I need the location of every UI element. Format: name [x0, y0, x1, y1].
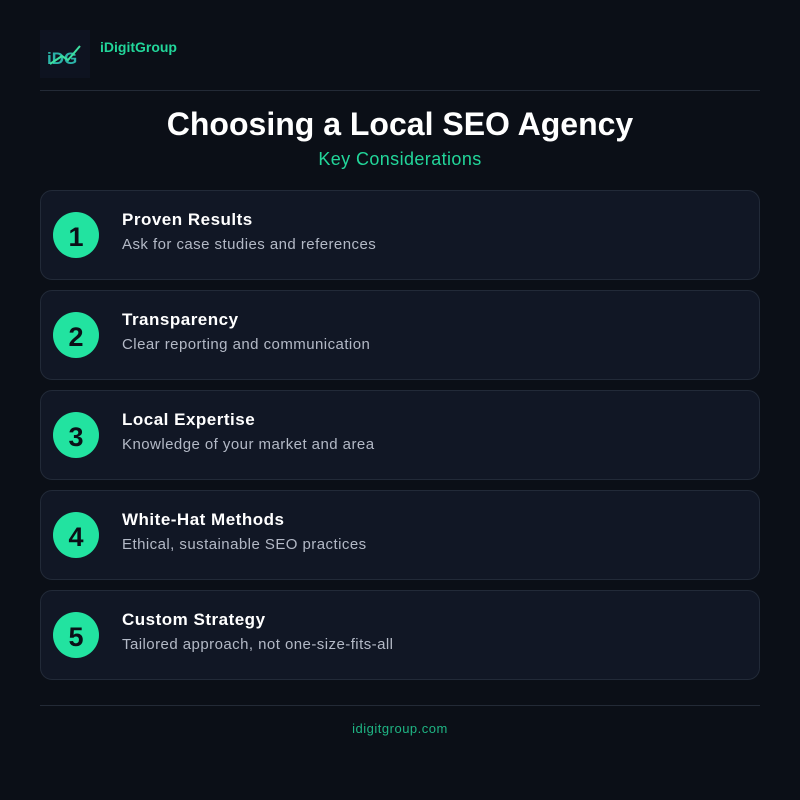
card 1: 1 [68, 222, 84, 252]
card 5: 5 [68, 622, 84, 652]
card 5: Tailored approach, not one-size-fits-all [122, 636, 393, 653]
footer: idigitgroup.com [352, 721, 448, 736]
card 3: 3 [68, 422, 84, 452]
card 3: Local Expertise [122, 410, 255, 429]
card 2: 2 [68, 322, 84, 352]
card 2: Clear reporting and communication [122, 336, 370, 353]
card 2: Transparency [122, 310, 239, 329]
card 1: Ask for case studies and references [122, 236, 376, 253]
card 4: 4 [68, 522, 84, 552]
card 2 [40, 290, 760, 380]
card 4: White-Hat Methods [122, 510, 284, 529]
card 3: Knowledge of your market and area [122, 436, 374, 453]
title: Choosing a Local SEO Agency [167, 106, 633, 142]
card 4 [40, 490, 760, 580]
card 1: Proven Results [122, 210, 253, 229]
header logo: iDG [47, 49, 77, 68]
card 1 [40, 190, 760, 280]
brand name: iDigitGroup [100, 39, 177, 55]
card 3 [40, 390, 760, 480]
subtitle: Key Considerations [318, 149, 482, 169]
card 5: Custom Strategy [122, 610, 266, 629]
card 4: Ethical, sustainable SEO practices [122, 536, 367, 553]
card 5 [40, 590, 760, 680]
header logo [40, 30, 90, 78]
